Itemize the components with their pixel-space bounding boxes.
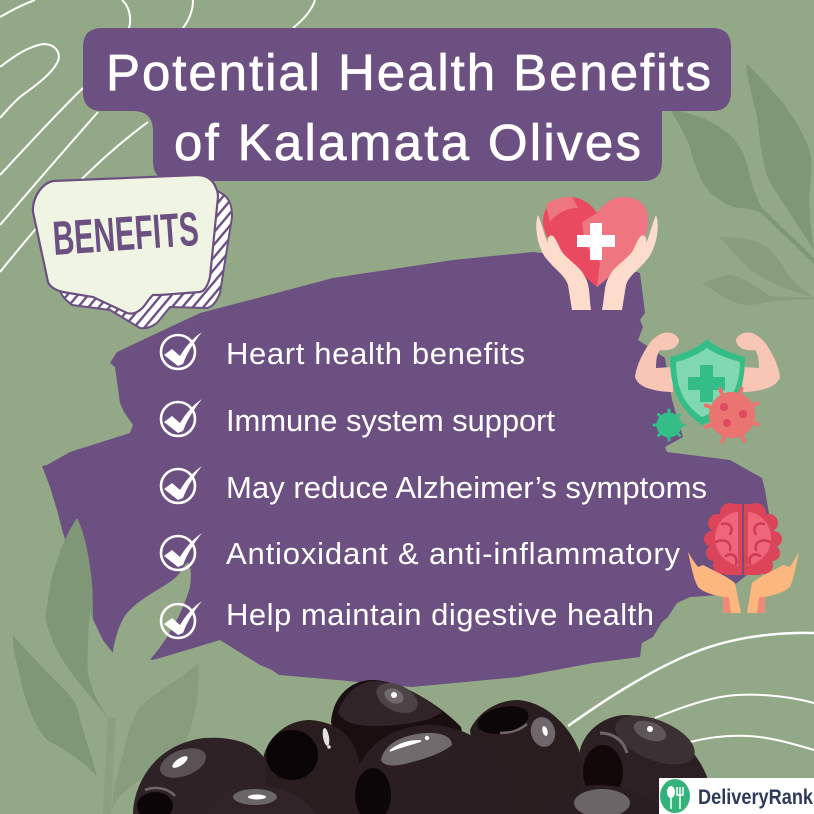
decorative white lines bottom-right [568, 633, 814, 750]
olive far left [133, 738, 265, 814]
icon: brain in hands [688, 503, 799, 613]
benefit 3: May reduce Alzheimer’s symptoms [226, 470, 707, 505]
olive with hole left [262, 720, 360, 814]
olive far right [580, 706, 707, 814]
olive big centre [352, 725, 512, 814]
olive top centre [331, 677, 470, 770]
olive right of centre [470, 700, 585, 814]
benefits speech bubble [33, 175, 232, 328]
leaves top-right [670, 63, 814, 305]
olive bottom right [540, 785, 660, 814]
olives [133, 677, 707, 814]
benefit 2: Immune system support [226, 403, 555, 438]
olive bottom left [204, 785, 316, 814]
title: of Kalamata Olives [174, 114, 641, 171]
benefit 1: Heart health benefits [226, 336, 525, 371]
icon: heart in hands [536, 197, 658, 310]
title banner [83, 28, 731, 181]
DeliveryRank logo [659, 778, 814, 814]
title [106, 44, 711, 171]
benefit 4: Antioxidant & anti-inflammatory [226, 536, 680, 571]
icon: strong immune shield [635, 332, 780, 451]
decorative white lines top-left [0, 0, 315, 272]
benefit 5: Help maintain digestive health [226, 597, 654, 632]
title: Potential Health Benefits [106, 44, 711, 101]
leaves bottom-left [13, 518, 199, 814]
benefits label: BENEFITS [51, 203, 200, 266]
brush stroke panel [42, 252, 770, 687]
